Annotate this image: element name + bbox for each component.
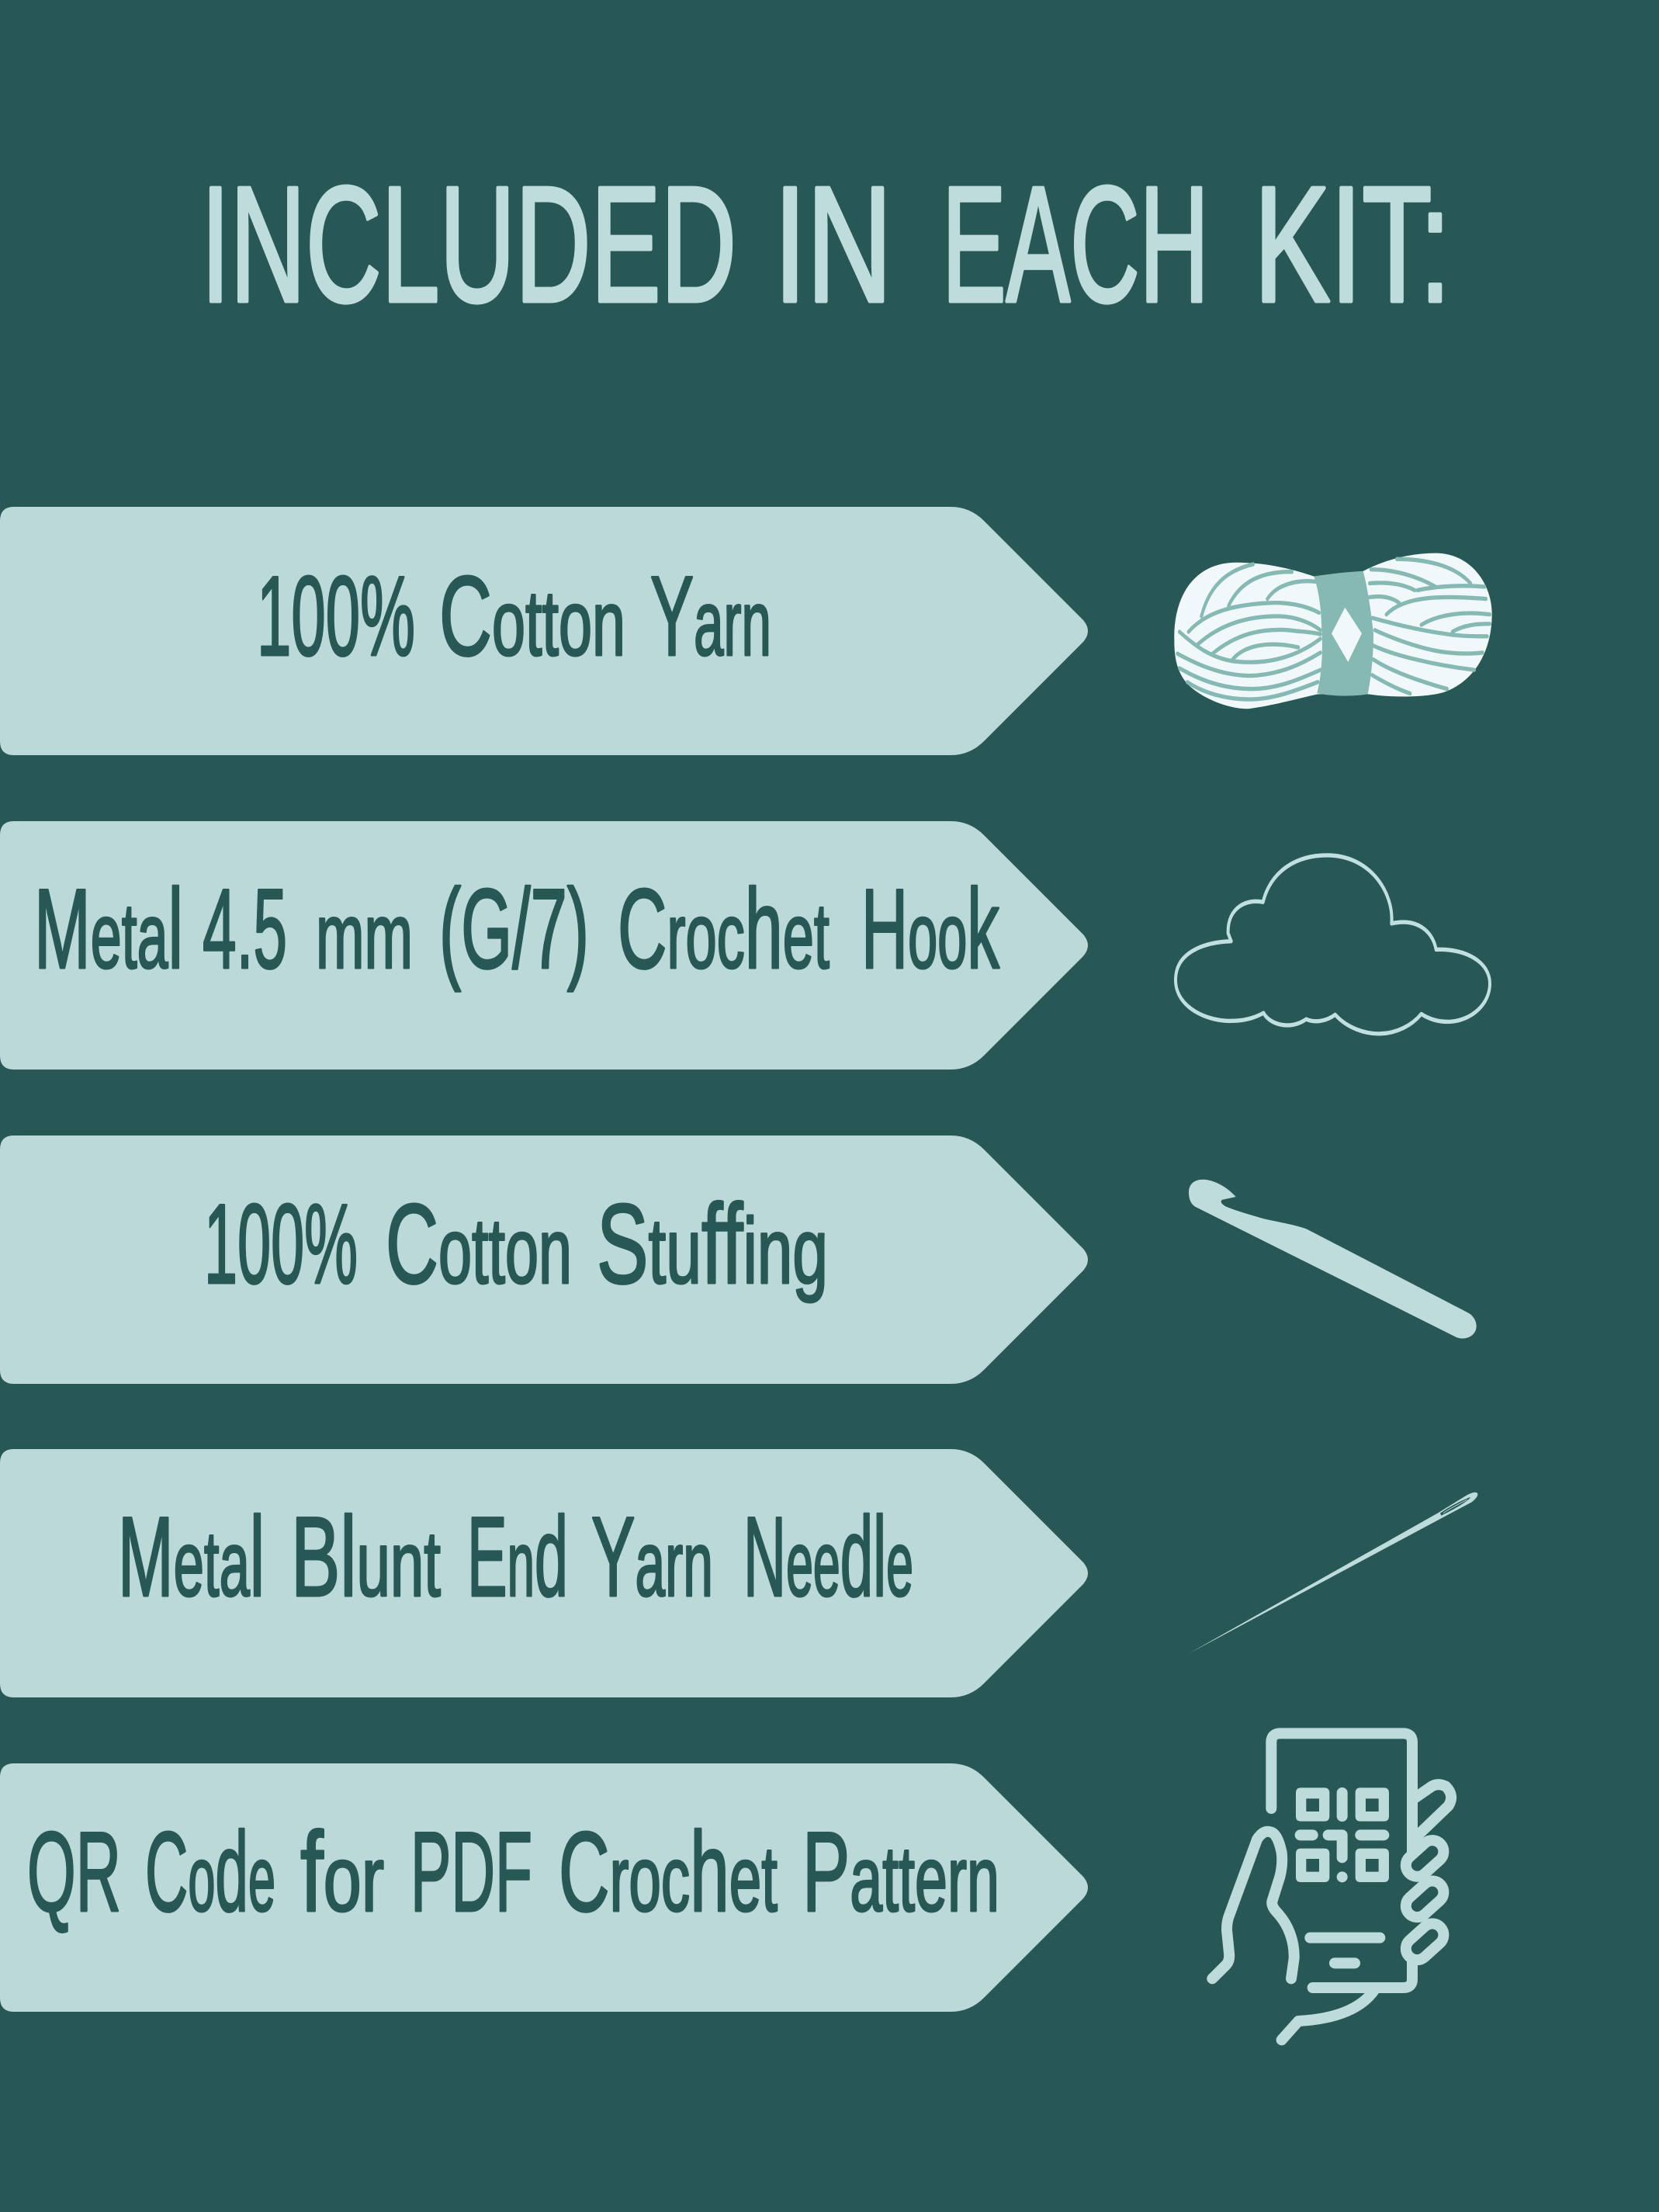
icon: yarn needle — [1189, 1493, 1477, 1654]
label: cotton stuffing: Cotton — [386, 1181, 572, 1307]
label: crochet hook: 4.5 — [203, 865, 287, 992]
label: cotton yarn: 100% — [257, 553, 415, 679]
label: cotton yarn — [257, 553, 771, 679]
title: INCLUDED — [201, 152, 736, 336]
title: IN — [774, 152, 892, 336]
label: crochet hook: mm — [316, 884, 413, 988]
label: QR code: Code — [145, 1808, 275, 1935]
label: crochet hook: Crochet — [618, 865, 830, 992]
arrow panel: yarn needle — [0, 1449, 1088, 1697]
icon: stuffing cloud — [1176, 855, 1490, 1034]
label: QR code: for — [300, 1808, 384, 1935]
icon: crochet hook — [1189, 1180, 1477, 1339]
label: QR code: QR — [27, 1808, 121, 1935]
label: crochet hook: Hook — [861, 865, 1000, 992]
label: crochet hook: Metal — [34, 865, 183, 992]
label: yarn needle: End — [467, 1493, 568, 1620]
label: yarn needle — [118, 1493, 913, 1620]
label: crochet hook — [34, 865, 1000, 992]
label: yarn needle: Yarn — [591, 1493, 713, 1620]
arrow panel: cotton stuffing — [0, 1135, 1088, 1384]
label: yarn needle: Blunt — [291, 1493, 441, 1620]
label: QR code — [27, 1808, 999, 1935]
label: QR code: Crochet — [559, 1808, 778, 1935]
label: cotton stuffing: Stuffing — [597, 1181, 828, 1307]
icon: yarn skein — [1174, 553, 1492, 709]
label: cotton yarn: Cotton — [439, 553, 625, 679]
arrow panel: cotton yarn — [0, 507, 1088, 755]
label: cotton stuffing: 100% — [204, 1181, 358, 1307]
arrow panel: crochet hook — [0, 821, 1088, 1070]
label: yarn needle: Metal — [118, 1493, 265, 1620]
icon: phone with QR code in hand — [1212, 1733, 1451, 2040]
title: KIT: — [1254, 152, 1451, 336]
title: EACH — [942, 152, 1209, 336]
label: crochet hook: (G/7) — [439, 865, 589, 992]
title — [201, 152, 1451, 336]
arrow panel: QR code — [0, 1763, 1088, 2012]
label: cotton stuffing — [204, 1181, 828, 1307]
label: QR code: Pattern — [802, 1808, 999, 1935]
label: yarn needle: Needle — [743, 1493, 913, 1620]
label: QR code: PDF — [410, 1808, 532, 1935]
label: cotton yarn: Yarn — [650, 553, 771, 679]
